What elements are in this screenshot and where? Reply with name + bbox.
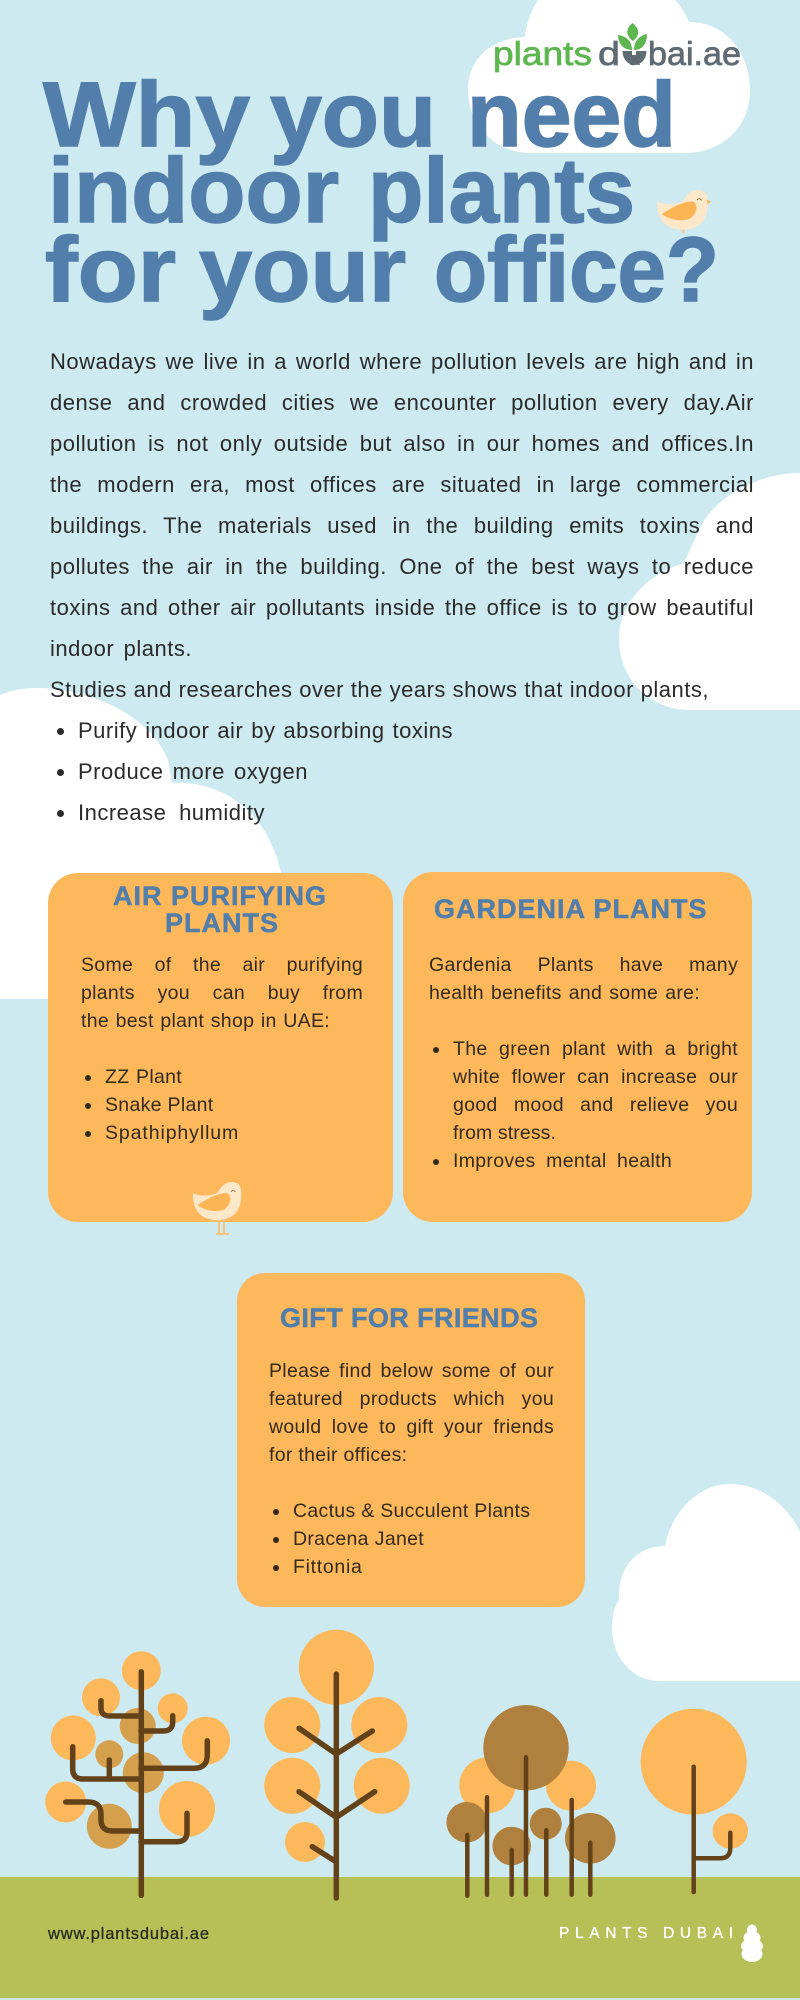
list: gardenia benefits: The green plant with a bright xyxy=(453,1038,738,1060)
intro text block: the modern era, most offices are situated in large commercial xyxy=(50,472,754,497)
text: gardenia intro: Gardenia Plants have many xyxy=(429,954,738,976)
intro text block: Purify indoor air by absorbing toxins xyxy=(78,718,453,743)
list: gift products: Fittonia xyxy=(293,1556,363,1578)
tree 1: branching xyxy=(45,1651,230,1895)
text: gift intro: for their offices: xyxy=(269,1444,407,1466)
intro text block: Produce more oxygen xyxy=(78,759,308,784)
heading: gardenia plants: GARDENIA PLANTS xyxy=(434,894,708,924)
title: you xyxy=(270,64,436,166)
tree 3: cluster of round trees xyxy=(446,1705,616,1896)
title: your xyxy=(199,219,406,321)
title: plants xyxy=(368,140,635,242)
text: air purifying intro: the best plant shop in UAE: xyxy=(81,1010,330,1032)
panel: air purifying plants xyxy=(48,873,393,1222)
text: gardenia intro xyxy=(429,954,738,1004)
text: gift intro xyxy=(269,1360,554,1466)
text: gift intro: Please find below some of our xyxy=(269,1360,554,1382)
cloud: bottom right xyxy=(612,1484,800,1681)
list: air purifying plants xyxy=(85,1066,239,1144)
list: gift products xyxy=(273,1500,530,1578)
list: gardenia benefits: Improves mental health xyxy=(453,1150,672,1172)
list: gardenia benefits xyxy=(433,1038,738,1172)
list: air purifying plants: Spathiphyllum xyxy=(105,1122,239,1144)
icon: white bush xyxy=(741,1924,763,1962)
heading: air purifying plants: PLANTS xyxy=(165,908,279,938)
title: indoor xyxy=(48,140,339,242)
heading: air purifying plants: AIR PURIFYING xyxy=(113,881,327,911)
cloud: top right xyxy=(468,0,750,153)
logo: plantsdubai.ae: plants xyxy=(493,35,592,72)
heading: air purifying plants xyxy=(113,881,327,938)
list: gift products: Cactus & Succulent Plants xyxy=(293,1500,530,1522)
title: for xyxy=(45,219,176,321)
list: air purifying plants: ZZ Plant xyxy=(105,1066,182,1088)
ground xyxy=(0,1877,800,1998)
cloud: middle left xyxy=(0,688,281,999)
text: air purifying intro: Some of the air purifying xyxy=(81,954,363,976)
list: gardenia benefits: good mood and relieve you xyxy=(453,1094,738,1116)
intro text block: dense and crowded cities we encounter pollution every day.Air xyxy=(50,390,754,415)
title: office? xyxy=(434,219,719,321)
logo: plantsdubai.ae: d xyxy=(598,35,620,72)
list: gift products: Dracena Janet xyxy=(293,1528,424,1550)
panel: gift for friends xyxy=(237,1273,585,1607)
intro text block: pollution is not only outside but also in our homes and offices.In xyxy=(50,431,754,456)
intro text block: Nowadays we live in a world where pollution levels are high and in xyxy=(50,349,754,374)
intro text block: buildings. The materials used in the building emits toxins and xyxy=(50,513,754,538)
text: air purifying intro xyxy=(81,954,363,1032)
logo: plantsdubai.ae: u xyxy=(627,41,641,71)
intro text block: Increase humidity xyxy=(78,800,265,825)
title: need xyxy=(467,64,676,166)
intro text block: Studies and researches over the years shows that indoor plants, xyxy=(50,677,709,702)
list: gardenia benefits: from stress. xyxy=(453,1122,556,1144)
intro text block: toxins and other air pollutants inside the office is to grow beautiful xyxy=(50,595,754,620)
panel: gardenia plants xyxy=(403,872,752,1222)
logo: plantsdubai.ae: bai.ae xyxy=(648,35,741,72)
intro text block xyxy=(50,349,754,825)
text: gift intro: would love to gift your friends xyxy=(269,1416,554,1438)
title: Why xyxy=(43,64,250,166)
intro text block: pollutes the air in the building. One of the best ways to reduce xyxy=(50,554,754,579)
text: gift intro: featured products which you xyxy=(269,1388,554,1410)
cloud: middle right xyxy=(619,473,800,710)
list: air purifying plants: Snake Plant xyxy=(105,1094,213,1116)
tree 2: forked xyxy=(264,1630,410,1898)
brand name: PLANTS DUBAI xyxy=(559,1925,733,1942)
intro text block: indoor plants. xyxy=(50,636,192,661)
heading: gift for friends: GIFT FOR FRIENDS xyxy=(280,1303,538,1333)
text: air purifying intro: plants you can buy from xyxy=(81,982,363,1004)
text: gardenia intro: health benefits and some are: xyxy=(429,982,700,1004)
tree 4: large round tree xyxy=(641,1709,748,1892)
list: gardenia benefits: white flower can increase our xyxy=(453,1066,738,1088)
website url: www.plantsdubai.ae xyxy=(47,1925,209,1943)
